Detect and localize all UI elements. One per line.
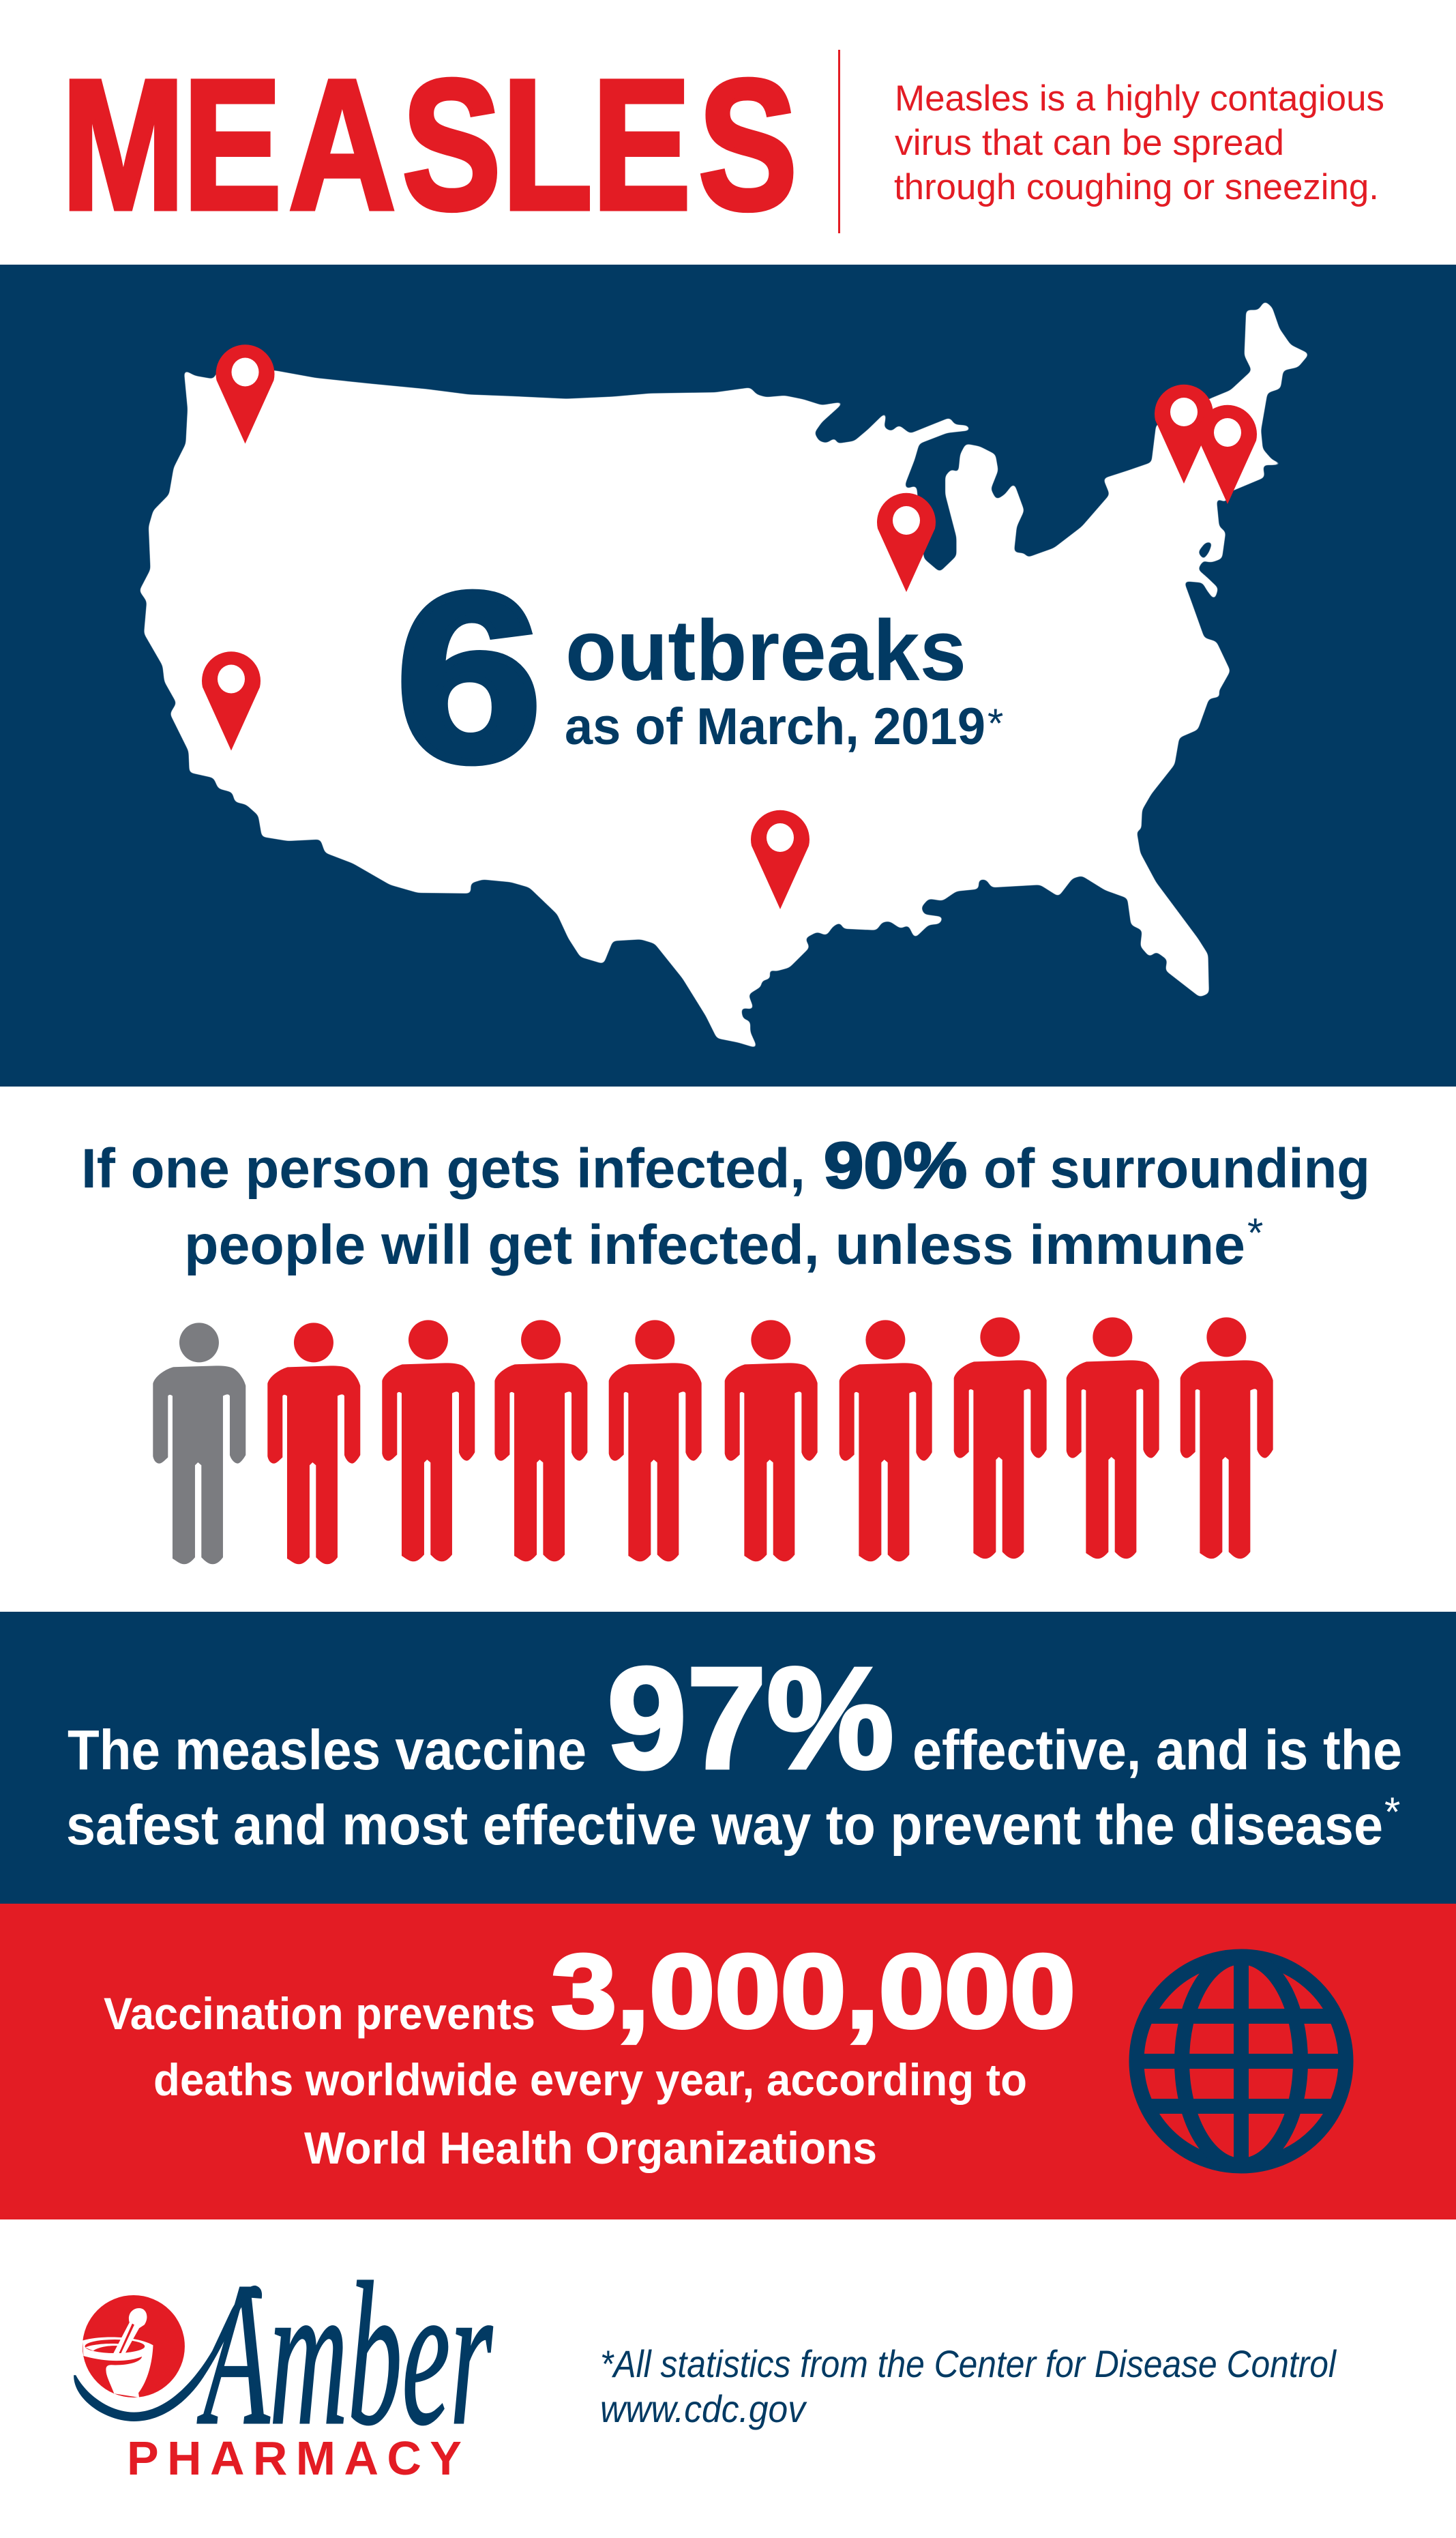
vaccine statement: 97%	[607, 1637, 894, 1799]
vaccine statement: The measles vaccine	[68, 1718, 586, 1782]
logo swoosh	[74, 2286, 262, 2421]
infection heading: *	[1247, 1210, 1263, 1256]
deaths statement: Vaccination prevents	[104, 1988, 535, 2039]
header	[61, 42, 1384, 249]
outbreak count: as of March, 2019	[565, 698, 985, 756]
map pins	[202, 344, 1257, 909]
deaths statement: 3,000,000	[551, 1933, 1075, 2050]
panel: vaccine effectiveness	[0, 1612, 1456, 1904]
infection heading	[81, 1130, 1370, 1276]
deaths statement: World Health Organizations	[304, 2123, 877, 2173]
logo: Amber Pharmacy	[74, 2241, 494, 2485]
vaccine statement	[66, 1637, 1402, 1857]
deaths statement: deaths worldwide every year, according to	[153, 2054, 1027, 2105]
logo wordmark: Amber	[196, 2241, 494, 2467]
header description	[894, 78, 1384, 207]
infection heading: of surrounding	[983, 1138, 1370, 1200]
logo icon: mortar and pestle	[74, 2286, 262, 2421]
icon: globe	[1136, 1956, 1346, 2166]
vaccine statement: safest and most effective way to prevent the disease	[66, 1793, 1383, 1857]
source note: *All statistics from the Center for Disease Control	[600, 2342, 1337, 2385]
deaths statement	[104, 1933, 1075, 2173]
header description: through coughing or sneezing.	[894, 167, 1379, 207]
outbreak count: 6	[396, 544, 541, 811]
panel: outbreak map	[0, 265, 1456, 1087]
logo subtitle: PHARMACY	[127, 2432, 462, 2485]
vaccine statement: effective, and is the	[912, 1718, 1402, 1782]
title: MEASLES	[61, 42, 797, 249]
people pictogram: 1 immune, 9 infected	[153, 1317, 1273, 1564]
vaccine statement: *	[1384, 1789, 1400, 1835]
map: United States	[139, 301, 1309, 1048]
panel: deaths prevented	[0, 1904, 1456, 2219]
infection heading: If one person gets infected,	[81, 1138, 805, 1200]
header description: Measles is a highly contagious	[895, 78, 1384, 119]
outbreak count: outbreaks	[565, 602, 966, 698]
source note	[600, 2342, 1337, 2430]
header description: virus that can be spread	[895, 123, 1284, 163]
outbreak count: *	[987, 700, 1003, 746]
outbreak count	[396, 544, 1003, 811]
source note: www.cdc.gov	[600, 2387, 807, 2430]
infection heading: people will get infected, unless immune	[184, 1214, 1245, 1276]
infection heading: 90%	[824, 1130, 967, 1202]
